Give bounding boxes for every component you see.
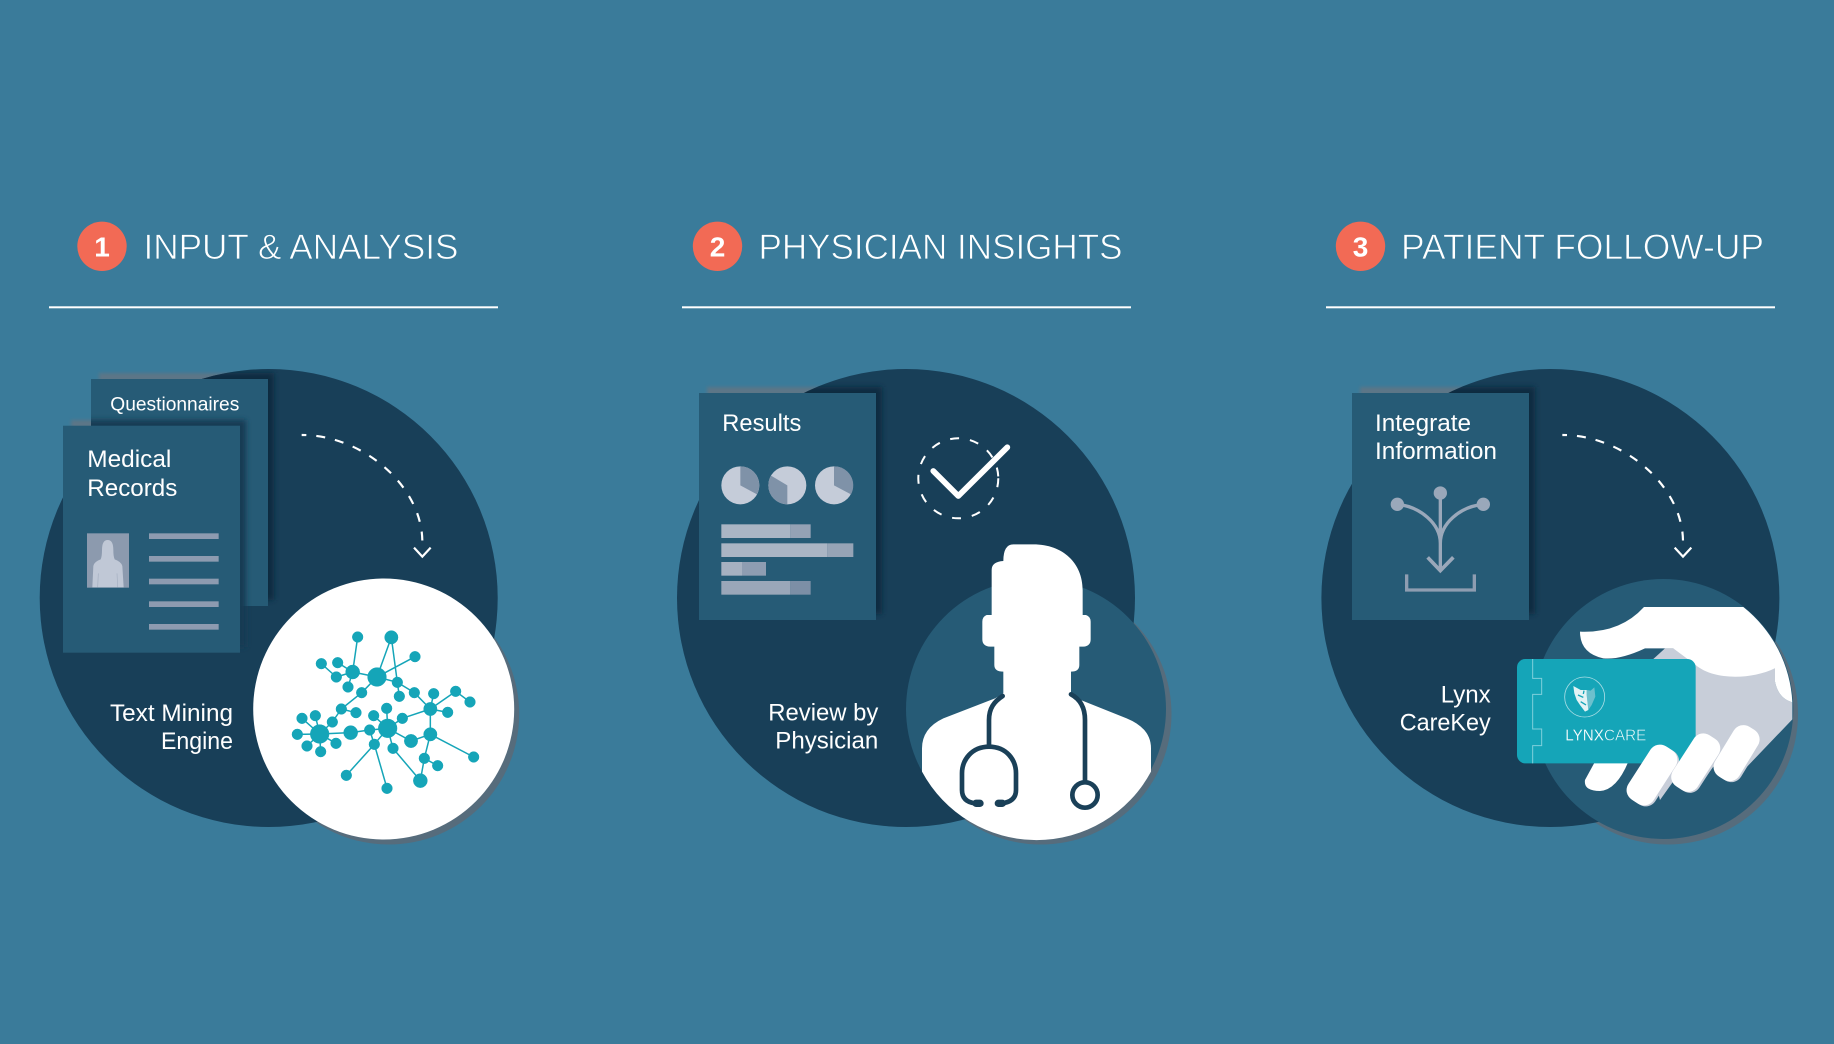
label: lynx carekey: Lynx: [1441, 681, 1491, 708]
logo: lynx head: [1565, 677, 1605, 717]
document: integrate information: Information: [1375, 438, 1497, 465]
panel: patient follow-up: [1321, 369, 1798, 844]
palm: [1650, 648, 1792, 800]
label: text mining engine: Engine: [161, 728, 233, 755]
header: step 2 physician insights: [682, 222, 1131, 308]
pie charts: [721, 466, 853, 504]
shadows of documents on background: [71, 373, 276, 647]
shadow of network circle: [258, 584, 519, 844]
heading: physician insights: PHYSICIAN INSIGHTS: [758, 227, 1122, 267]
record text lines: [149, 533, 219, 630]
number badge 3: 3: [1353, 232, 1368, 262]
label: lynx carekey: CareKey: [1400, 710, 1491, 737]
shadow of results document on background: [707, 387, 884, 614]
large dark circle: [40, 369, 498, 827]
label: review by physician: Review by: [768, 700, 878, 727]
stethoscope: [962, 694, 1098, 808]
label: text mining engine: [110, 700, 233, 755]
document: questionnaires: Questionnaires: [110, 395, 239, 416]
shadow of carekey circle: [1537, 584, 1798, 844]
large dark circle: [1321, 369, 1779, 827]
number badge 2: [693, 222, 742, 271]
fingers: [1622, 721, 1766, 811]
header: step 3 patient follow-up: [1326, 222, 1775, 308]
icon: physician with stethoscope: [922, 544, 1151, 840]
document: integrate information: [1352, 387, 1535, 620]
shadow of integrate document on background: [1360, 387, 1537, 614]
lower finger: [1585, 762, 1628, 791]
icon: dashed circle with check mark: [918, 438, 1007, 518]
header: step 1 input and analysis: [49, 222, 498, 308]
number badge 1: [77, 222, 127, 271]
thumb and back of hand: [1580, 607, 1792, 702]
heading: input and analysis: INPUT & ANALYSIS: [144, 227, 458, 267]
arrow: dashed curve to carekey: [1562, 435, 1691, 557]
document: results: Results: [722, 410, 801, 437]
panel: physician insights: [677, 369, 1172, 844]
document: medical records: [63, 420, 246, 653]
physician circle: [906, 579, 1166, 839]
panel: input and analysis: [40, 369, 519, 844]
icon: merge into tray: [1391, 486, 1490, 590]
icon: patient photo: [87, 533, 129, 588]
document: integrate information: Integrate: [1375, 410, 1471, 437]
icon: hand holding card: [1517, 607, 1792, 811]
carekey circle: [1533, 579, 1793, 839]
card wordmark: LYNXCARE: [1565, 728, 1646, 745]
label: text mining engine: Text Mining: [110, 700, 233, 727]
white circle: [253, 578, 514, 840]
number badge 1: 1: [94, 232, 110, 262]
large dark circle: [677, 369, 1135, 827]
document: questionnaires: [91, 373, 274, 606]
card: lynxcare: [1517, 659, 1696, 763]
label: review by physician: Physician: [775, 728, 878, 755]
arrow: dashed curve to text mining engine: [302, 435, 431, 557]
network graph: [292, 631, 479, 794]
document: medical records: Medical: [87, 446, 171, 473]
number badge 3: [1336, 222, 1385, 271]
shadow of physician circle: [910, 584, 1172, 844]
heading: patient follow-up: PATIENT FOLLOW-UP: [1401, 227, 1764, 267]
label: review by physician: [768, 700, 878, 755]
label: lynx carekey: [1400, 681, 1491, 737]
stacked bar chart: [721, 524, 853, 595]
document: medical records: Records: [87, 475, 177, 502]
document: results: [699, 387, 882, 620]
number badge 2: 2: [710, 232, 725, 262]
